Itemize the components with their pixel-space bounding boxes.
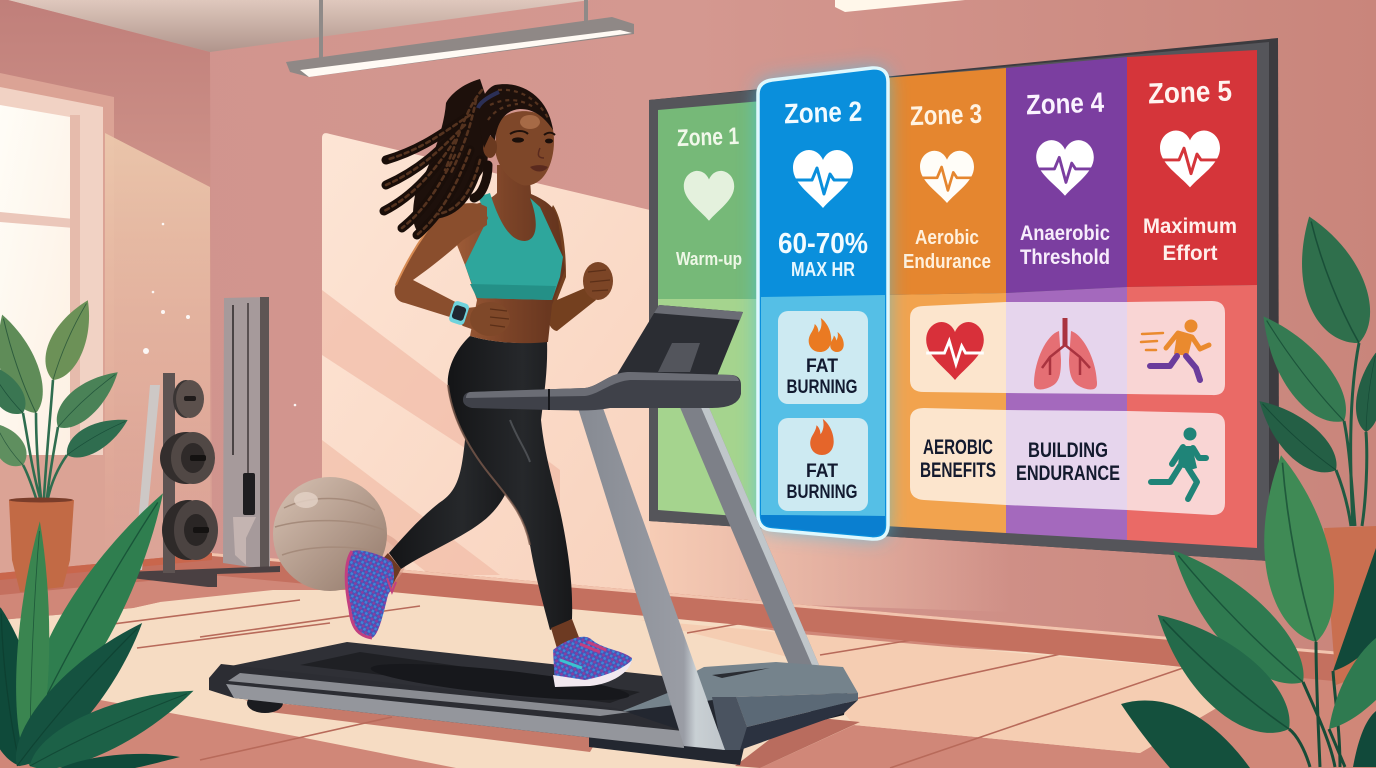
- zone 5 heart: [1160, 131, 1220, 187]
- wall screen: [649, 38, 1279, 561]
- watch: [448, 300, 470, 326]
- foreground plant right: [1121, 450, 1376, 768]
- treadmill floor shadow: [245, 700, 600, 752]
- icon: double flame: [809, 318, 844, 352]
- fat burning card 1: [778, 311, 868, 404]
- rear foot: [247, 693, 283, 713]
- panel glow: [758, 68, 888, 539]
- left side wall: [0, 0, 212, 590]
- motor housing: [589, 662, 858, 765]
- zone 3 column: [885, 68, 1006, 533]
- rear arm and fist: [395, 203, 510, 336]
- runner: [346, 79, 632, 687]
- zone 5 title: Zone 5: [1147, 76, 1233, 110]
- left potted plant: [0, 293, 134, 592]
- aerobic benefits label: BENEFITS: [920, 459, 996, 482]
- sports bra: [465, 193, 563, 300]
- ceiling lamp 2: [835, 0, 965, 12]
- foreground plant left: [0, 479, 202, 768]
- torso: [446, 165, 565, 343]
- aerobic benefits label: [920, 436, 996, 482]
- front ankle: [551, 619, 580, 652]
- deck: [221, 642, 700, 712]
- zone 5 column: [1127, 50, 1257, 548]
- zone 1 heart: [684, 171, 734, 221]
- 60-70% value: 60-70%: [778, 228, 868, 260]
- floor tiles: [0, 590, 1230, 768]
- icon: teal runner: [1151, 428, 1206, 499]
- zone 5 label: Maximum: [1143, 215, 1237, 238]
- ceiling lamp 1: [286, 0, 634, 77]
- side rail: [209, 664, 684, 748]
- hair band: [478, 92, 499, 108]
- aerobic benefits label: AEROBIC: [923, 436, 993, 459]
- front upright: [578, 408, 725, 750]
- weight rack: [123, 373, 280, 587]
- icon: flame: [810, 419, 834, 455]
- cornrow hair: [478, 84, 553, 148]
- exercise ball: [273, 477, 406, 591]
- zone 4 column: [1006, 57, 1127, 540]
- benefits row 2 card: [910, 408, 1225, 515]
- zone 4 label: [1020, 222, 1110, 269]
- sunlight beam on left wall: [105, 133, 210, 560]
- fat burning card 2: BURNING: [786, 482, 858, 503]
- dust particles: [143, 223, 296, 406]
- building endurance label: ENDURANCE: [1016, 462, 1120, 485]
- zone 2 heart: [793, 150, 853, 208]
- zone 4 label: Threshold: [1020, 246, 1110, 269]
- icon: lungs: [1034, 318, 1097, 390]
- fat burning card 1: FAT: [806, 356, 838, 377]
- screen frame: [649, 42, 1269, 561]
- right potted plant: [1244, 207, 1376, 685]
- zone 3 heart: [920, 151, 974, 203]
- fat burning card 1: BURNING: [786, 377, 858, 398]
- treadmill base: [209, 405, 858, 765]
- console: [616, 305, 743, 376]
- head: [483, 111, 555, 186]
- max hr label: MAX HR: [791, 259, 855, 281]
- front arm and fist: [530, 205, 613, 331]
- weight plates: [160, 380, 218, 560]
- zone 5 label: Effort: [1162, 242, 1218, 265]
- back leg ankle: [380, 553, 401, 584]
- building endurance label: [1016, 439, 1120, 485]
- zone 3 label: Endurance: [903, 251, 991, 273]
- floor: [0, 572, 1376, 768]
- handlebar: [463, 372, 741, 410]
- zone 2 highlighted panel: [758, 68, 888, 539]
- fat burning card 2: [778, 418, 868, 511]
- zone 3 title: Zone 3: [909, 99, 982, 131]
- zone 2 title: Zone 2: [783, 96, 862, 129]
- building endurance label: BUILDING: [1028, 439, 1108, 462]
- zone 3 label: Aerobic: [915, 227, 979, 249]
- zone 4 label: Anaerobic: [1020, 222, 1110, 245]
- cable machine: [223, 297, 270, 570]
- icon: red heart: [926, 322, 984, 380]
- window: [0, 73, 114, 570]
- zone 1 title: Zone 1: [677, 123, 739, 152]
- ceiling: [8, 0, 590, 52]
- fat burning card 2: FAT: [806, 461, 838, 482]
- benefits row 1 card: [910, 301, 1225, 395]
- zone 1 column: [658, 101, 762, 518]
- screen shadow frame: [649, 38, 1279, 561]
- ponytail braids: [384, 79, 492, 235]
- zone 3 label: [903, 227, 991, 273]
- panel body: [758, 68, 888, 539]
- front leg and hips: [448, 336, 572, 630]
- rear upright: [679, 405, 819, 665]
- baseboard: [0, 553, 1376, 685]
- treadmill console and handlebar: [463, 305, 743, 410]
- front shoe: [553, 637, 632, 687]
- icon: orange runner: [1141, 320, 1209, 380]
- zone 1 label: Warm-up: [676, 249, 742, 269]
- zone 4 title: Zone 4: [1025, 87, 1105, 120]
- back leg: [389, 430, 511, 569]
- zone 5 label: [1143, 215, 1237, 265]
- back shoe: [346, 550, 396, 638]
- zone 4 heart: [1036, 140, 1094, 196]
- sunlight patch on wall: [322, 133, 1010, 612]
